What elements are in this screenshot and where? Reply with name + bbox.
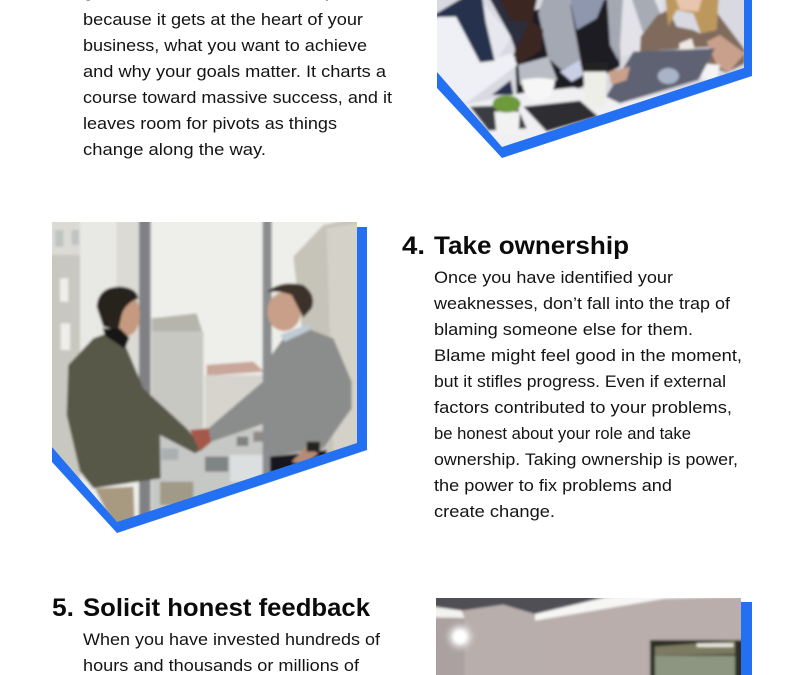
text block: step 3 body: course toward massive success, and it <box>83 88 392 107</box>
photo: two men shaking hands with blue frame <box>43 215 368 535</box>
text block: step 4 body: the power to fix problems and <box>434 476 672 495</box>
step 4 heading: 4. <box>402 232 425 260</box>
text block: step 5 body <box>83 630 380 675</box>
photo: office room with blue frame <box>436 598 752 675</box>
text block: step 3 body: leaves room for pivots as things <box>83 114 337 133</box>
text block: step 4 body: ownership. Taking ownership is power, <box>434 450 738 469</box>
text block: step 4 body: be honest about your role and take <box>434 424 691 443</box>
text block: step 4 body: Once you have identified your <box>434 268 674 287</box>
text block: step 3 body: because it gets at the heart of your <box>83 10 364 29</box>
text block: step 4 body: factors contributed to your problems, <box>434 398 732 417</box>
text block: step 3 body: change along the way. <box>83 140 266 159</box>
text block: step 4 body: weaknesses, don’t fall into the trap of <box>433 294 730 313</box>
text block: step 3 body: business, what you want to achieve <box>83 36 367 55</box>
step 4 heading: Take ownership <box>434 232 629 260</box>
text block: step 4 body: blaming someone else for them. <box>434 320 693 339</box>
text block: step 3 body <box>83 0 392 159</box>
text block: step 5 body: When you have invested hundreds of <box>83 630 380 649</box>
step 5 heading: 5. <box>52 594 74 622</box>
text block: step 4 body: Blame might feel good in the moment, <box>434 346 742 365</box>
text block: step 4 body: create change. <box>434 502 555 521</box>
text block: step 3 body: and why your goals matter. It charts a <box>83 62 387 81</box>
text block: step 4 body: but it stifles progress. Even if external <box>434 372 726 391</box>
text block: step 4 body <box>433 268 742 521</box>
photo: team around a laptop with blue frame <box>430 0 752 158</box>
text block: step 5 body: hours and thousands or millions of <box>83 656 359 675</box>
step 5 heading: Solicit honest feedback <box>83 594 370 622</box>
